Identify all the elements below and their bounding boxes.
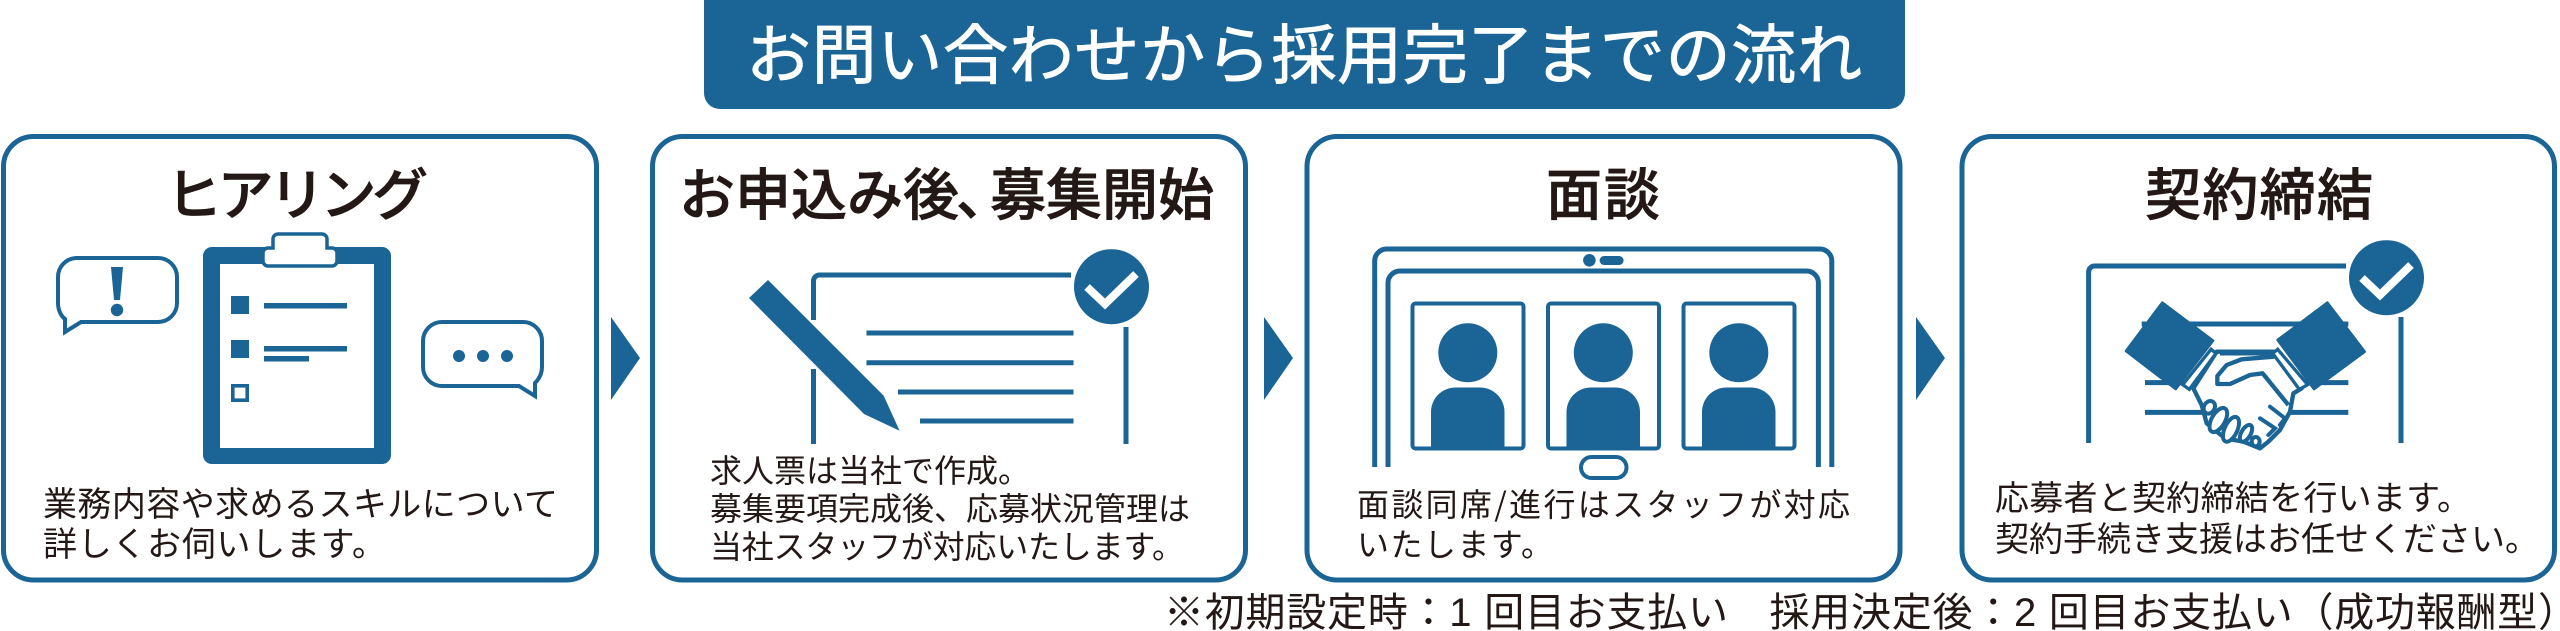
- panel: interview: [1307, 136, 1900, 580]
- description: hearing: 業務内容や求めるスキルについて: [43, 477, 558, 526]
- description: contract: 応募者と契約締結を行います。: [1995, 471, 2471, 520]
- description: recruitment start: 募集要項完成後、応募状況管理は: [710, 484, 1190, 530]
- description: interview: いたします。: [1357, 520, 1553, 566]
- icon: contract with handshake: [2089, 240, 2424, 448]
- heading: interview: 面談: [1546, 151, 1660, 232]
- arrow: step 1 to 2: [611, 317, 640, 400]
- icon: speech bubble ellipsis: [423, 322, 542, 396]
- video frame: person 2: [1548, 304, 1659, 448]
- heading: hearing: ヒアリング: [166, 151, 428, 232]
- description: contract: 契約手続き支援はお任せください。: [1995, 512, 2539, 561]
- panel: recruitment start: [652, 136, 1246, 580]
- description: recruitment start: [710, 446, 1190, 568]
- description: hearing: [43, 477, 558, 566]
- description: interview: [1357, 480, 1850, 566]
- heading: recruitment start: お申込み後: [679, 151, 959, 232]
- video frame: person 3: [1684, 304, 1794, 448]
- icon: document with pen: [749, 249, 1149, 444]
- icon: clipboard: [203, 234, 391, 464]
- description: hearing: 詳しくお伺いします。: [43, 517, 386, 566]
- arrow: step 3 to 4: [1916, 317, 1945, 400]
- icon: speech bubble exclamation: [58, 258, 177, 332]
- title banner: お問い合わせから採用完了までの流れ: [746, 3, 1862, 97]
- panel: contract: [1962, 136, 2554, 580]
- heading: recruitment start: 、: [956, 151, 1012, 232]
- arrow: step 2 to 3: [1264, 317, 1293, 400]
- description: recruitment start: 当社スタッフが対応いたします。: [710, 522, 1184, 568]
- video frame: person 1: [1412, 304, 1524, 448]
- icon: video call tablet: [1375, 249, 1832, 478]
- description: recruitment start: 求人票は当社で作成。: [710, 446, 1030, 492]
- heading: contract: 契約締結: [2145, 151, 2373, 232]
- heading: recruitment start: 募集開始: [990, 151, 1214, 232]
- panel: hearing: [4, 136, 596, 580]
- description: interview: 面談同席/進行はスタッフが対応: [1357, 480, 1850, 526]
- description: contract: [1995, 471, 2539, 561]
